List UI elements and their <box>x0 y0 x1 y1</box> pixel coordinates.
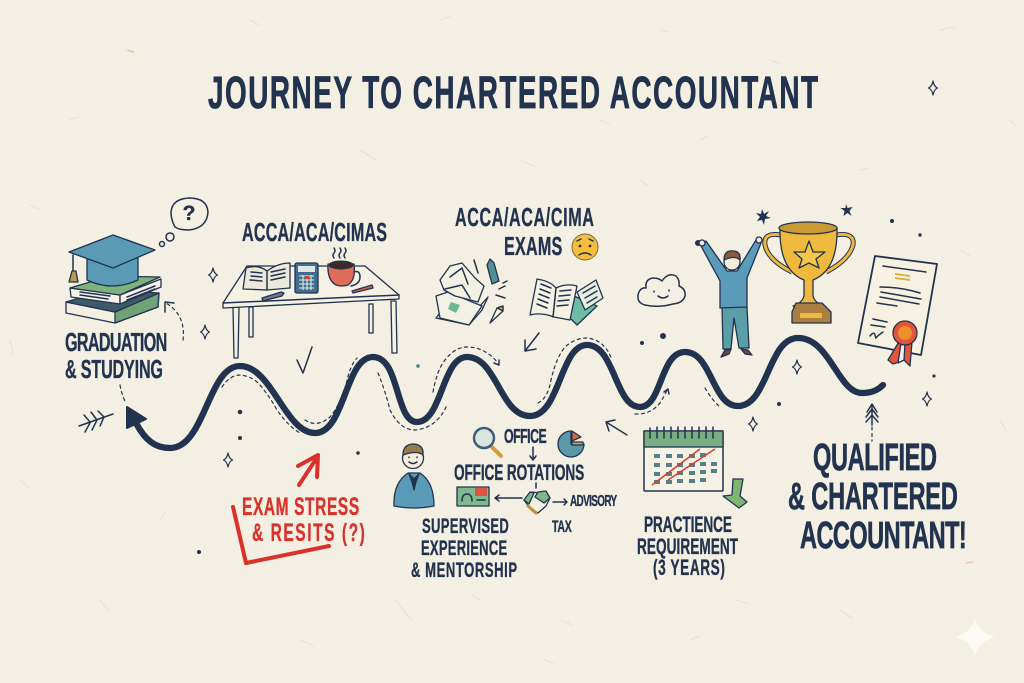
torso and arms <box>701 240 761 308</box>
icon: calendar <box>644 427 723 491</box>
heading: graduation and studying <box>65 327 167 384</box>
top book <box>70 276 161 304</box>
red arrow <box>298 455 318 485</box>
calculator <box>295 263 318 293</box>
text: practice requirement: (3 YEARS) <box>653 555 725 580</box>
text: supervised experience and mentorship: SUPERVISED <box>422 514 509 538</box>
icon: study desk <box>223 248 399 358</box>
open book <box>243 263 290 290</box>
arrow to advisory <box>553 499 567 505</box>
text: supervised experience and mentorship: EXPERIENCE <box>421 536 507 560</box>
icon: smiling cloud <box>638 275 685 306</box>
stars near trophy <box>756 204 852 225</box>
text: qualified and chartered accountant: ACCOUNTANT! <box>800 513 967 556</box>
mortarboard <box>69 235 155 286</box>
dotted arrow to books <box>165 302 183 340</box>
arrow down <box>530 447 536 460</box>
legs <box>722 307 749 349</box>
decorative dots <box>197 219 936 554</box>
winding journey path <box>127 338 883 448</box>
dashed guide lines along the path <box>120 338 720 433</box>
ribbon seal <box>888 321 917 366</box>
icon: gold trophy <box>765 222 853 323</box>
text: supervised experience and mentorship <box>411 514 517 582</box>
callout: exam stress and resits: & RESITS (?) <box>252 519 365 547</box>
arrow-feather decoration left <box>79 411 113 432</box>
pencils <box>474 259 507 323</box>
check mark <box>297 347 312 373</box>
pencils <box>352 285 373 293</box>
text: qualified and chartered accountant <box>788 435 967 556</box>
heading: ACCA/ACA/CIMAS: ACCA/ACA/CIMAS <box>242 217 387 247</box>
icon: celebrating person <box>699 237 762 357</box>
arrow to card <box>495 495 522 501</box>
sparkles right <box>748 81 938 431</box>
text: practice requirement: PRACTIENCE <box>644 512 732 537</box>
arrow to path <box>525 333 539 351</box>
rotation link <box>535 483 537 488</box>
text: qualified and chartered accountant: QUALIFIED <box>813 435 937 478</box>
text: office rotations: OFFICE ROTATIONS <box>454 460 584 485</box>
text: qualified and chartered accountant: & CHARTERED <box>788 474 958 517</box>
icon: thought bubble with question mark <box>160 198 208 246</box>
icon: green arrow <box>723 479 747 508</box>
icon: graduation cap on books <box>66 235 161 323</box>
icon: thought bubble with question mark: ? <box>183 202 195 225</box>
bottom book <box>66 290 159 323</box>
icon: magnifier <box>474 428 501 456</box>
heading: exams <box>455 202 594 261</box>
coffee mug <box>328 248 360 286</box>
table <box>223 266 399 358</box>
text: advisory: ADVISORY <box>570 492 617 510</box>
icon: pie chart <box>558 431 584 457</box>
icon: open books with notes <box>530 279 603 325</box>
shoes <box>721 349 752 357</box>
text: tax: TAX <box>552 516 572 536</box>
small arrow <box>606 420 627 435</box>
icon: certificate with ribbon <box>858 256 937 366</box>
arrow-feather decoration right <box>866 404 878 441</box>
icon: worried face <box>572 234 598 260</box>
text: office: OFFICE <box>504 425 547 448</box>
watermark sparkle <box>955 618 995 656</box>
crumpled papers <box>436 263 488 325</box>
hands <box>699 240 705 246</box>
text: practice requirement <box>637 512 738 580</box>
callout: exam stress and resits <box>233 455 365 563</box>
red text: EXAM STRESS <box>242 493 359 521</box>
sparkles left <box>200 268 232 467</box>
heading: exams: ACCA/ACA/CIMA <box>455 202 594 232</box>
head <box>724 254 740 270</box>
title: JOURNEY TO CHARTERED ACCOUNTANT <box>208 67 818 118</box>
text: practice requirement: REQUIREMENT <box>637 534 738 559</box>
icon: handshake <box>524 491 550 513</box>
heading: graduation and studying: & STUDYING <box>65 354 163 384</box>
heading: exams: EXAMS <box>504 231 562 261</box>
icon: green card <box>457 487 489 506</box>
text: supervised experience and mentorship: & MENTORSHIP <box>411 558 517 582</box>
red bracket <box>233 507 329 563</box>
icon: crumpled papers and pencils <box>436 259 507 325</box>
icon: mentor <box>394 444 434 508</box>
heading: graduation and studying: GRADUATION <box>65 327 167 357</box>
